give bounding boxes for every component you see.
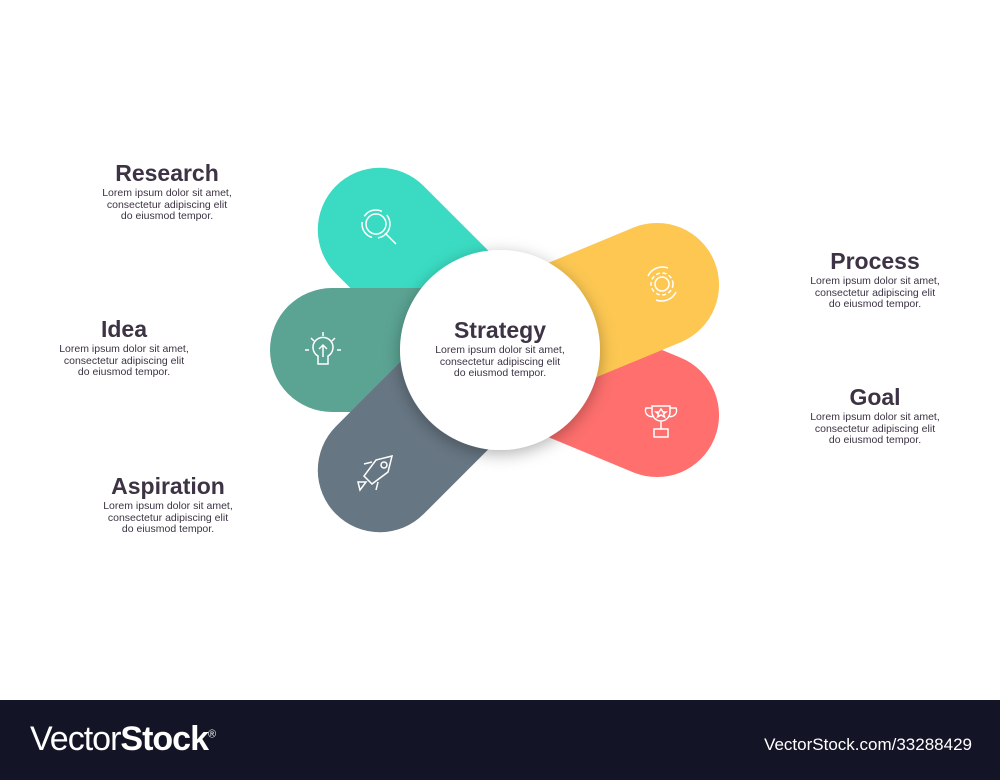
text: goal: do eiusmod tempor. (829, 434, 921, 446)
text: research: consectetur adipiscing elit (107, 198, 227, 210)
text: aspiration (103, 473, 233, 535)
petal: research (292, 142, 544, 394)
text: aspiration: consectetur adipiscing elit (108, 512, 228, 524)
text: strategy: Strategy (454, 317, 546, 343)
text: idea: Lorem ipsum dolor sit amet, (59, 343, 189, 355)
icon: trophy (645, 406, 677, 437)
petal: aspiration (292, 306, 544, 558)
text: goal: consectetur adipiscing elit (815, 422, 935, 434)
text: goal: Goal (849, 384, 901, 410)
text: strategy (435, 317, 565, 379)
text: goal: Lorem ipsum dolor sit amet, (810, 411, 940, 423)
petal: goal (476, 293, 738, 496)
text: strategy: do eiusmod tempor. (454, 367, 546, 379)
icon: gear (648, 267, 676, 301)
icon: magnifier (362, 210, 396, 244)
petal: process (476, 204, 738, 407)
text: aspiration: Lorem ipsum dolor sit amet, (103, 500, 233, 512)
text: process: Lorem ipsum dolor sit amet, (810, 275, 940, 287)
petal: idea (270, 288, 500, 412)
text: process: consectetur adipiscing elit (815, 286, 935, 298)
text: strategy: Lorem ipsum dolor sit amet, (435, 344, 565, 356)
text: idea: do eiusmod tempor. (78, 366, 170, 378)
text: idea: Idea (101, 316, 147, 342)
text: aspiration: Aspiration (111, 473, 225, 499)
text: idea (59, 316, 189, 378)
footer logo: VectorStock® (30, 720, 215, 758)
text: research: Lorem ipsum dolor sit amet, (102, 187, 232, 199)
text: research (102, 160, 232, 222)
text: research: Research (115, 160, 219, 186)
text: aspiration: do eiusmod tempor. (122, 523, 214, 535)
text: process: do eiusmod tempor. (829, 298, 921, 310)
text: research: do eiusmod tempor. (121, 210, 213, 222)
icon: rocket (358, 456, 392, 490)
footer bar (0, 700, 1000, 780)
icon: bulb (305, 332, 341, 364)
text: process: Process (830, 248, 920, 274)
text: strategy: consectetur adipiscing elit (440, 356, 560, 368)
text: idea: consectetur adipiscing elit (64, 354, 184, 366)
text: process (810, 248, 940, 310)
footer url: VectorStock.com/33288429 (764, 735, 972, 754)
text: goal (810, 384, 940, 446)
center circle (400, 250, 600, 450)
